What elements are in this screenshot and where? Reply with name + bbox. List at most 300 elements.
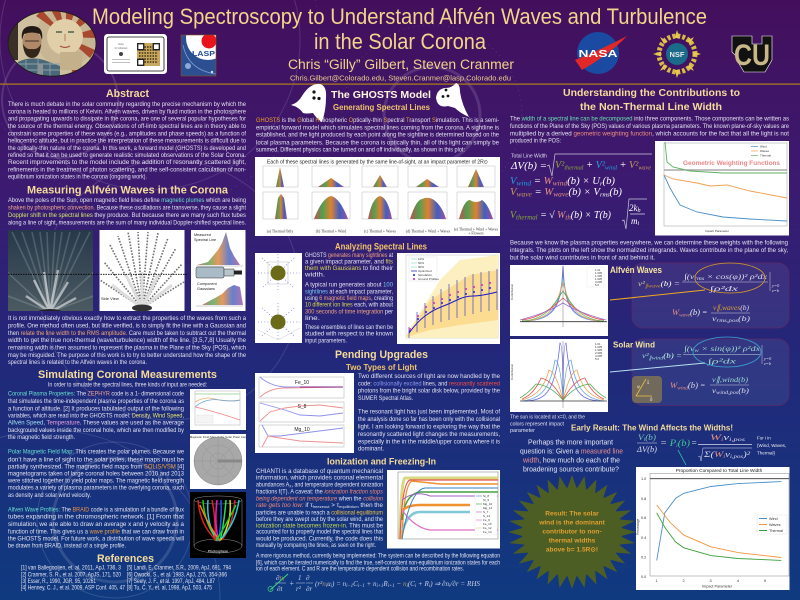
panel: pending upgrades: photons from the bright solar disk below, provided by the [358, 388, 501, 395]
equation: ionization balance: i [449, 584, 451, 589]
chart: ionization fractions versus radius: Si_9 [483, 498, 489, 502]
panel: simulating coronal measurements: tubes expanding in the chromospheric network. [1] From that [8, 514, 184, 521]
panel: Alfven waves equations: v² [638, 279, 644, 288]
figure: grid of simulated spectral lines: (b) Thermal + Wind [316, 230, 346, 234]
equation: thermal velocity: th [565, 214, 571, 222]
chart: solar wind integrand curves: Contribution [510, 363, 514, 380]
panel: abstract: refinements in the treatment of photon scattering, and the self-consistent calculation of non- [8, 166, 246, 173]
panel: understanding the contributions: integrals. The plots on the left show the normalized integrands. Waves contribute in the plane of the sky, [510, 247, 788, 254]
callout: star burst result: wind is the dominant [538, 520, 606, 526]
chart: Alfven wave integrand curves: 1.01 [595, 268, 601, 272]
equation: total line width: V² [629, 160, 639, 171]
equation: thermal velocity: thermal [516, 214, 538, 222]
icon: right ghost eyes [442, 89, 449, 98]
caption: plot description: parameter [510, 428, 535, 434]
image: simulated corona with plumes [8, 230, 93, 311]
image: measured spectral line, telescope and component Gaussians [191, 230, 246, 311]
panel: ionization and freezing-in: then the [359, 502, 384, 509]
equation: ionization balance: r² [296, 585, 302, 593]
panel: abstract: refined so that it can be used to generate realistic simulated observations of the Solar Corona. [8, 152, 246, 159]
image: measured spectral line, telescope and component Gaussians: Component [197, 282, 218, 286]
equation: thermal velocity: (b) × T(b) [571, 210, 612, 221]
equation: proportion of line width [636, 433, 786, 461]
panel: ionization and freezing-in: ion of each element. C and R are the temperature dependent collision and recombination rates. [256, 566, 464, 573]
title: in the Solar Corona [314, 29, 487, 54]
panel: analyzing spectral lines: line. [305, 315, 320, 322]
panel: Alfven waves equations: (b) [738, 314, 751, 323]
question text: broadening sources contribute? [523, 466, 619, 474]
panel: pending upgrades: light. I am looking forward to exploring the way that the [358, 424, 501, 431]
panel: ionization and freezing-in: fractions f(T). A caveat: the ionization fraction stops [256, 489, 383, 496]
caption: plot description [510, 415, 585, 434]
panel: simulating coronal measurements: variables, which are read into the GHOSTS model: Density, Wind Speed, [8, 413, 184, 420]
equation: proportion of line width: v [723, 433, 730, 442]
panel: measuring Alfven waves: may be misguided. The purpose of this work is to try to better understand how the shape of the [8, 352, 246, 359]
panel: abstract [8, 88, 247, 181]
panel: solar wind equations: wind [677, 386, 688, 392]
chart: proportion compared to total line width [636, 467, 790, 590]
chart: ionization fractions versus radius: Mg_10 [483, 502, 493, 506]
title [92, 4, 707, 54]
panel: Alfven waves equations: rms,pos [717, 319, 738, 324]
equation: ionization balance: i−1 [346, 584, 353, 589]
chart: solar wind integrand curves [510, 339, 608, 412]
panel: solar wind equations: ∥wind [649, 356, 664, 362]
chart: line width versus impact parameter with error bars: 10% [418, 257, 424, 261]
panel: ionization and freezing-in: and temperature dependent ionization [295, 482, 399, 489]
logo: NASA [575, 32, 627, 74]
equation: thermal velocity: = √ [538, 210, 557, 221]
panel: pending upgrades: Pending Upgrades [335, 349, 428, 361]
chart: geometric weighting functions: Waves [760, 149, 770, 153]
panel: ionization and freezing-in: before they are swept out by the solar wind, and the [256, 516, 383, 523]
equation: thermal velocity: m [631, 216, 638, 226]
panel: references: [8] Tu, C. Y., et. al, 1998, ApJ, 503, 475 [127, 585, 212, 592]
figure: grid of simulated spectral lines: (a) Thermal Only [267, 230, 293, 234]
panel: simulating coronal measurements: the magnetic field strength. [8, 434, 75, 441]
equation: proportion of line width: (b) [678, 438, 690, 448]
equation: wave velocity: (b) × V [569, 187, 602, 198]
chart: solar wind integrand curves: 1.005 [595, 345, 602, 349]
callout: blue integrand ellipse [693, 337, 761, 367]
logo: CU: CU [734, 39, 770, 72]
panel: simulating coronal measurements: Alfvén Speed, Temperature. These values are used as the average [8, 420, 185, 427]
chart: line width versus impact parameter with error bars: Optimized [418, 269, 432, 273]
chart: Alfven wave integrand curves: 4.005 [595, 280, 602, 284]
panel: ionization and freezing-in: freezeout [313, 504, 330, 509]
equation: proportion of line width: v [725, 450, 731, 459]
panel: measuring Alfven waves: Doppler shift in the spectral lines they produce. But because there are many such flux tubes [8, 212, 246, 219]
panel: pending upgrades: especially in the in the middle/upper corona where it is [358, 438, 500, 445]
panel: Alfven waves equations: rms [694, 277, 704, 282]
icon: left ghost eyes [312, 90, 321, 100]
chart: proportion compared to total line width: 1 [656, 579, 658, 583]
panel: abstract: Recent improvements to the model include the addition of resonantly scattered light, [8, 159, 246, 166]
panel: simulating coronal measurements: the GHOSTS model. For future work, a distribution of wave speeds will [8, 536, 184, 543]
panel: the GHOSTS model: local plasma parameters. Because the corona is optically thin, all of this light can simply be [256, 139, 500, 146]
panel: understanding the contributions [510, 88, 789, 262]
logo: LASP [180, 34, 216, 76]
chart: solar wind integrand curves: 2.905 [595, 351, 602, 355]
panel: solar wind equations: (b) [688, 381, 698, 390]
panel: abstract: equilibrium ionization states in the corona (ongoing work). [8, 174, 147, 181]
panel: solar wind equations: (b) [738, 386, 750, 395]
chart: ionization fractions versus radius: Si_8 [483, 494, 489, 498]
panel: analyzing spectral lines: Analyzing Spectral Lines [335, 242, 427, 252]
panel: measuring Alfven waves: then relate the line width to the RMS amplitude. Care must be taken to subtract out the thermal [8, 330, 246, 337]
equation: proportion of line width: i [676, 444, 678, 449]
chart: proportion compared to total line width: 0.6 [641, 516, 646, 520]
panel: solar wind equations: y=0 [763, 356, 772, 361]
figure: grid of simulated spectral lines [255, 157, 500, 236]
QR code card: Scan [118, 43, 124, 46]
chart: ZEPHYR plasma properties [190, 389, 246, 430]
chart: polar magnetic field map: Magnetic Field Map of the Solar Polar Cap [190, 435, 247, 439]
equation: wave velocity: = [532, 187, 544, 198]
chart: ionization fractions versus radius [387, 470, 500, 548]
question text: width, how much do each of the [522, 458, 620, 464]
icon: right ghost [436, 83, 469, 117]
equation: wave velocity: (b) [610, 187, 623, 198]
chart: geometric weighting functions: Impact Parameter [705, 229, 729, 233]
equation: ionization balance: /∂r = RHS [449, 579, 480, 588]
panel: simulating coronal measurements: were stitched together to yield polar maps. The magnetic field strength [7, 478, 185, 485]
panel: analyzing spectral lines: them with Gaussians to find their [305, 265, 393, 272]
panel: simulating coronal measurements: In order to simulate the spectral lines, three kinds of input are needed: [48, 382, 207, 389]
panel: references: [2] Cranmer, S. R., et al. 2007, ApJS, 171, 520 [21, 571, 121, 578]
panel: simulating coronal measurements: Polar Magnetic Field Map: This creates the polar plumes. Because we [8, 449, 185, 456]
image: BRAID flux tube simulation [190, 492, 246, 558]
panel: pending upgrades: resonantly scattered light changes the measurements, [358, 431, 500, 438]
chart: collisional and resonant fractions: S_8 [298, 404, 307, 410]
panel: simulating coronal measurements: simulation, we are able to draw an average x and y velocity as a [8, 521, 185, 528]
callout: star burst result: Result: The solar [545, 510, 599, 518]
panel: pending upgrades: Two different sources of light are now handled by the [358, 373, 501, 380]
equation: wind velocity: = [531, 176, 544, 187]
panel: simulating coronal measurements: partially synthesized. The magnetic field maps from SOLIS/VSM [4] [8, 463, 184, 470]
callout: star burst result [505, 473, 639, 591]
equation: proportion of line width: i [644, 438, 646, 443]
equation: total line width: ΔV(b) = [510, 161, 547, 172]
equation: thermal velocity: W [557, 210, 567, 221]
panel: measuring Alfven waves: Measuring Alfvén Waves in the Corona [27, 184, 229, 196]
panel: ionization and freezing-in: being dependent on temperature when the collision [256, 495, 384, 502]
equation: wind velocity: (b) [603, 176, 616, 187]
panel: solar wind equations [610, 337, 789, 406]
panel: ionization and freezing-in: > τ [330, 502, 340, 509]
equation: proportion of line width: i [723, 455, 726, 460]
panel: measuring Alfven waves: spectral lines is related to the Alfvén waves in the corona. [8, 359, 147, 366]
icon: angle diagram: x̂ [646, 381, 650, 386]
panel: simulating coronal measurements: function of time. This gives us a wave profile that we can draw from in [8, 528, 185, 535]
panel: ionization and freezing-in: information, which provides coronal elemental [256, 475, 383, 482]
panel: solar wind equations: × sin(φ))² ρ²dx [699, 344, 761, 353]
equation: proportion of line width: Thermal} [757, 450, 776, 456]
panel: ionization and freezing-in: , [292, 482, 293, 489]
panel: ionization and freezing-in: [6], which can be iterated numerically to find the true, self-consistent non-equilibrium ionization states for each [256, 560, 500, 567]
chart: proportion compared to total line width: 0.8 [641, 497, 646, 501]
equation: ionization balance: i [283, 577, 285, 582]
equation: ionization balance: C [353, 579, 359, 588]
callout: star burst result: thermal widths [549, 538, 596, 544]
chart: proportion compared to total line width: 0.0 [641, 575, 646, 579]
equation: total line width: + [617, 160, 629, 171]
chart: line width versus impact parameter with error bars: Ground Profiles [418, 277, 439, 281]
panel: analyzing spectral lines: sightlines at each impact parameter, [305, 288, 393, 295]
panel: abstract: There is much debate in the solar community regarding the precise mechanism by which the [8, 101, 247, 108]
authors: Chris “Gilly” Gilbert, Steven Cranmer [288, 57, 515, 72]
panel: Alfven waves equations: v [712, 314, 715, 323]
equation: ionization balance: + [289, 579, 294, 588]
panel: measuring Alfven waves: remaining width is then assumed to represent the plasma in the Plane of the Sky (POS), which [8, 344, 247, 351]
chart: ionization fractions versus radius: Fe_9 [483, 518, 490, 522]
equation: proportion of line width: {Wind, Waves, [757, 443, 786, 448]
equation: thermal velocity: b [638, 208, 640, 214]
panel: abstract: constrain some properties of these waves (e.g., amplitudes and phase speeds) as a function of [8, 130, 246, 137]
panel: early result: Early Result: The Wind Affects the Widths! [571, 422, 733, 432]
equation: wind velocity: V [510, 176, 519, 187]
panel: simulating coronal measurements: modulates a variety of plasma parameters in the overlying corona, such [8, 485, 184, 492]
chart: proportion compared to total line width: Thermal [769, 529, 783, 533]
arrow: to Alfven wave plot [610, 290, 705, 300]
panel: simulating coronal measurements: Coronal Plasma Properties: The ZEPHYR code is a 1- dimensional code [8, 391, 184, 398]
panel: abstract: and propagating upwards to dissipate in the corona, are one of several popular hypotheses for [8, 116, 246, 123]
chart: Alfven wave integrand curves: 5.0 [595, 283, 599, 287]
panel: solar wind equations: = [700, 381, 705, 390]
panel: pending upgrades: dominant. [358, 446, 384, 453]
equation: total line width: wind [605, 166, 618, 172]
chart: line width versus impact parameter with error bars: 50% [418, 261, 424, 265]
panel: references [21, 553, 231, 592]
equation: proportion of line width: i [721, 438, 724, 443]
panel: solar wind equations: w [694, 349, 700, 354]
question text [520, 440, 623, 474]
equation: ionization balance: i+1 [388, 584, 395, 589]
panel: solar wind equations: (b) = [663, 351, 682, 360]
panel: ionization and freezing-in: would be produced. Currently, the code does this [255, 535, 383, 542]
panel: ionization and freezing-in: A more rigorous method, currently being implemented: The system can be described by the following equation [256, 553, 500, 560]
equation: ionization balance: i [331, 584, 333, 589]
panel: ionization and freezing-in: equilibrium [339, 504, 359, 509]
panel: pending upgrades: The resonant light has just been implemented. Most of [358, 409, 500, 416]
caption: plot description: colors represent impact [510, 422, 564, 428]
equation: wave velocity: wave [553, 190, 569, 198]
panel: references: [3] Esser, R., 1990, JGR, 95, 10261 [21, 578, 96, 585]
equation: proportion of line width: = P [660, 438, 675, 448]
equation: thermal velocity: V [510, 210, 518, 221]
panel: abstract: corona is heated to millions of Kelvin. Alfvén waves, driven by fluid motion in the photosphere [8, 108, 247, 115]
equation: ionization balance: (C [408, 579, 416, 588]
chart: proportion compared to total line width: 4 [737, 579, 739, 583]
callout: star burst result: contributor to non- [542, 528, 602, 536]
question text: question is: Given a measured line [520, 448, 623, 456]
panel: early result [505, 422, 790, 591]
panel: analyzing spectral lines [255, 242, 500, 344]
equation: proportion of line width: i,pos [730, 455, 743, 460]
chart: proportion compared to total line width: Proportion Compared to Total Line Width [676, 468, 763, 474]
chart: collisional and resonant fractions: Mg_10 [294, 427, 310, 433]
panel: ionization and freezing-in: accounted for to properly model the spectral lines that [256, 529, 383, 536]
equation: proportion of line width: = [691, 438, 697, 448]
equation: ionization balance: ∂n [276, 574, 283, 582]
chart: collisional and resonant fractions: Fe_10 [295, 380, 309, 386]
panel: simulating coronal measurements: be drawn from BRAID, instead of a single profile. [8, 543, 126, 550]
panel: ionization and freezing-in [255, 456, 500, 593]
panel: ionization and freezing-in: particles are unable to reach a collisional equilibrium [256, 509, 383, 516]
equation: ionization balance: i [326, 584, 328, 589]
equation: ionization balance: + R [416, 579, 429, 588]
icon: angle diagram [632, 376, 662, 403]
QR code card: for Abstract [115, 47, 128, 50]
question text: Perhaps the more important [528, 440, 613, 447]
panel: pending upgrades: code: collisionally excited lines, and resonantly scattered [358, 380, 501, 387]
equation: ionization balance: u [327, 579, 331, 588]
equation: ionization balance: + n [365, 579, 377, 588]
panel: simulating coronal measurements: as density and solar wind velocity. [8, 492, 91, 499]
panel: analyzing spectral lines: width. [304, 272, 325, 279]
equation: total line width: Total Line Width [511, 154, 547, 160]
equation: proportion of line width: i,pos [729, 438, 745, 443]
panel: Alfven waves equations: ∥wave [645, 284, 662, 290]
equation: total line width: thermal [564, 166, 584, 172]
equation: ionization balance: ∂r [306, 585, 312, 593]
equation: total line width: V² [596, 160, 606, 171]
panel: Alfven waves equations: Alfvén Waves [610, 265, 662, 275]
chart: geometric weighting functions: Wind [760, 144, 767, 148]
panel: analyzing spectral lines: GHOSTS generates many sightlines at [305, 252, 393, 259]
equation: wave velocity: V [510, 187, 519, 198]
panel: solar wind equations: v² [642, 351, 648, 360]
panel: ionization and freezing-in: manually by comparing the times, as seen on the right. [256, 542, 376, 549]
chart: geometric weighting functions: Thermal [760, 154, 771, 158]
equation: ionization balance: R [382, 579, 388, 588]
panel: the GHOSTS model: Generating Spectral Lines [333, 103, 431, 112]
equation: ionization balance: ∂ [306, 574, 310, 582]
arrow: to solar wind plot [610, 363, 705, 372]
image: side view of waving flux tubes [100, 230, 184, 312]
panel: Alfven waves equations: v∥,waves(b) [713, 303, 749, 312]
chart: proportion compared to total line width: 3 [710, 579, 712, 583]
equation: ionization balance: ) = n [331, 579, 346, 588]
header divider line [0, 84, 800, 85]
panel: measuring Alfven waves: width to get the true non-thermal (wave/turbulence) width of the line. [3,5,7,8] Usually the [7, 337, 247, 344]
panel: simulating coronal measurements: Simulating Coronal Measurements [38, 369, 217, 381]
chart: ionization fractions versus radius: S_14 [483, 514, 490, 518]
panel: measuring Alfven waves [5, 184, 247, 366]
panel: pending upgrades: Two Types of Light [346, 362, 417, 372]
panel: ionization and freezing-in: rate gets too low: if τ [256, 502, 313, 509]
panel: abstract: the source of the thermal energy. Observations of off-limb spectral lines are in theory able to [8, 123, 247, 130]
chart: geometric weighting functions: Geometric Weighting Functions [683, 160, 780, 167]
panel: simulating coronal measurements [7, 369, 247, 558]
panel: pending upgrades: the analysis done so far has been only with the collisional [358, 416, 500, 423]
panel: analyzing spectral lines: 300 seconds of time integration per [305, 308, 393, 315]
equation: total line width [510, 154, 652, 176]
equation: wind velocity: (b) × U [567, 176, 601, 187]
panel: solar wind equations: z=b [763, 361, 772, 366]
figure: grid of simulated spectral lines: (c) Thermal + Waves [364, 230, 396, 234]
equation: ionization balance: i [429, 584, 431, 589]
panel: references: [6] Owocki, S., et al. 1983, ApJ, 275, 354-366 [127, 571, 227, 578]
panel: abstract: heliocentric altitude, but in practice the interpretation of these measurements is difficult due to [8, 138, 247, 145]
panel: measuring Alfven waves: shaken by photospheric convection. Because these oscillations are transverse, they cause a slight [8, 204, 246, 211]
chart: ionization fractions versus radius: Mg_14 [483, 506, 493, 510]
panel: simulating coronal measurements: magnetograms taken of large coronal holes between 2010 and 2013 [8, 470, 185, 477]
panel: solar wind equations: wind,pos [716, 391, 738, 396]
image: measured spectral line, telescope and component Gaussians: Measured [194, 233, 211, 237]
panel: pending upgrades: SUMER Spectral Atlas. [358, 395, 413, 402]
panel: Alfven waves equations: (b) [690, 308, 700, 317]
panel: analyzing spectral lines: input parameters. [305, 337, 347, 344]
equation: wind velocity: wind [517, 180, 532, 188]
figure: grid of simulated spectral lines: + Flowers [468, 232, 484, 236]
equation: total line width: + [584, 160, 596, 171]
panel: understanding the contributions: multiplied by a derived geometric weighting function, which accounts for the fact that all the light is not [510, 130, 789, 137]
chart: line width versus impact parameter with error bars: Simulation [418, 273, 432, 277]
chart: polar magnetic field map [190, 434, 247, 489]
panel: Alfven waves equations: z=b [771, 288, 780, 293]
equation: proportion of line width: Σ( W [704, 450, 721, 459]
panel: Alfven waves equations: y=0 [771, 283, 780, 288]
logo: LASP: LASP [192, 49, 215, 58]
equation: proportion of line width: )² [742, 450, 751, 459]
callout: orange integrand ellipse [695, 263, 765, 293]
logo: NSF [653, 30, 701, 78]
image: side view of waving flux tubes: Side View [101, 296, 119, 301]
panel: the GHOSTS model: The GHOSTS Model [331, 89, 431, 101]
arrow: to proportion chart [678, 450, 686, 465]
chart: solar wind integrand curves: 1.905 [595, 348, 602, 352]
chart: ionization fractions versus radius: Fe_13 [483, 530, 492, 534]
panel: Alfven waves equations: W [672, 308, 679, 317]
equation: proportion of line width: ΔV(b) [636, 445, 657, 454]
panel: solar wind equations: Solar Wind [613, 340, 655, 350]
line of sight dashed line [8, 273, 187, 275]
chart: proportion compared to total line width: 0.4 [641, 536, 646, 540]
panel: references: [7] Seely, J. F., et al. 1997, ApJ, 484, L87 [127, 578, 215, 585]
panel: ionization and freezing-in: ionization state becomes frozen-in. This must be [256, 522, 384, 529]
chart: line width versus impact parameter with error bars: 90% [418, 265, 424, 269]
equation: thermal velocity: 2k [629, 203, 638, 213]
equation: wave velocity: W [544, 187, 555, 198]
panel: solar wind equations: ∫(v [684, 344, 692, 353]
chart: collisional and resonant fractions [255, 373, 354, 453]
equation: ionization balance: n [403, 579, 407, 588]
panel: analyzing spectral lines: studied with respect to the known [305, 331, 394, 338]
image: measured spectral line, telescope and component Gaussians: Gaussians [197, 287, 215, 291]
equation: ionization balance: 1 [298, 574, 302, 582]
figure: grid of simulated spectral lines: Each of these spectral lines is generated by the same line-of-sight, at an impact parameter of 2R⊙ [267, 160, 488, 166]
equation: ionization balance: i [415, 584, 417, 589]
chart: proportion compared to total line width: 0.2 [641, 556, 646, 560]
panel: solar wind equations: v∥,wind(b) [712, 375, 749, 384]
photo: presenter in front of a sun carving [8, 5, 97, 77]
panel: the GHOSTS model: GHOSTS is the Global Heliospheric Optically-thin Spectral Transport Simulation. This is a semi- [256, 117, 499, 124]
panel: understanding the contributions: the Non-Thermal Line Width [580, 102, 722, 113]
equation: ionization balance: − [395, 579, 403, 588]
chart: Alfven wave integrand curves [510, 265, 608, 336]
chart: proportion compared to total line width: Percentage [636, 518, 640, 535]
panel: solar wind equations: W [670, 381, 677, 390]
panel: references: [1] van Ballegooijen, et. al. 2011, ApJ, 736, 3 [21, 565, 121, 572]
panel: measuring Alfven waves: profile. One method often used, but little verified, is to simply fit the line with a Gaussian and [8, 322, 247, 329]
panel: the GHOSTS model: empirical forward model which simulates spectral lines coming from the corona. A sightline is [256, 124, 499, 131]
equation: wind velocity: r [600, 182, 603, 188]
panel: ionization and freezing-in: X [289, 484, 292, 489]
panel: simulating coronal measurements: a function of altitude. [2] It produces tabulated output of the following [8, 405, 185, 412]
equation: proportion of line width: (b) [645, 433, 656, 442]
figure: grid of simulated spectral lines: (d) Thermal + Wind + Waves [406, 230, 451, 234]
